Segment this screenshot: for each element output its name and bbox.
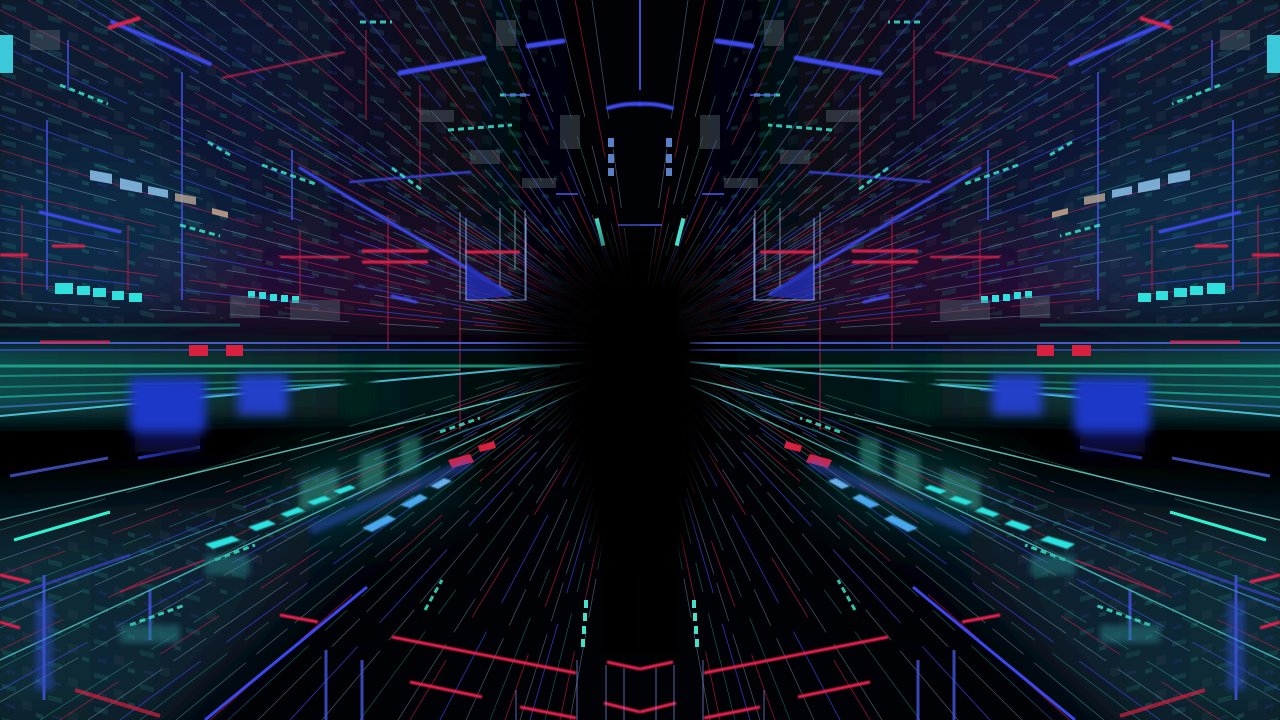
cyan floor tiles	[205, 478, 452, 549]
perspective floor lines	[0, 378, 590, 720]
radial lines: pale blue	[0, 0, 640, 720]
center vertical tick marks	[581, 138, 614, 647]
glowing blue panels	[130, 372, 373, 452]
lower left glow panels	[35, 555, 250, 690]
left half of tunnel	[0, 0, 790, 720]
floor cell texture	[0, 470, 350, 720]
vertical struts	[22, 30, 525, 720]
teal dash clusters	[60, 22, 530, 625]
bottom red frame	[0, 575, 640, 718]
lower wall glow	[0, 430, 500, 720]
center dark column	[600, 285, 640, 655]
upper red dashes	[0, 18, 520, 262]
upper blue dashes	[40, 22, 640, 302]
cyan tile rows	[0, 35, 299, 303]
grey circuit blocks	[30, 20, 580, 320]
translucent teal floor panels	[300, 435, 420, 512]
horizontal teal band lines	[0, 325, 590, 416]
right half of tunnel (mirror)	[490, 0, 1280, 720]
convergence fade	[490, 210, 790, 470]
center void	[555, 250, 725, 590]
wall cell texture	[0, 0, 570, 330]
radial lines: teal	[0, 0, 640, 720]
blue floor glow stripe	[310, 462, 470, 530]
pale window strip	[90, 170, 228, 218]
upper wall glow	[0, 0, 580, 335]
bottom frame struts	[516, 660, 624, 720]
upper center lines	[504, 0, 640, 225]
teal horizontal band	[0, 345, 570, 485]
red markers	[189, 345, 496, 468]
blue cube	[466, 218, 526, 300]
radial lines: saturated blue	[0, 0, 640, 720]
radial lines: red	[0, 0, 640, 720]
